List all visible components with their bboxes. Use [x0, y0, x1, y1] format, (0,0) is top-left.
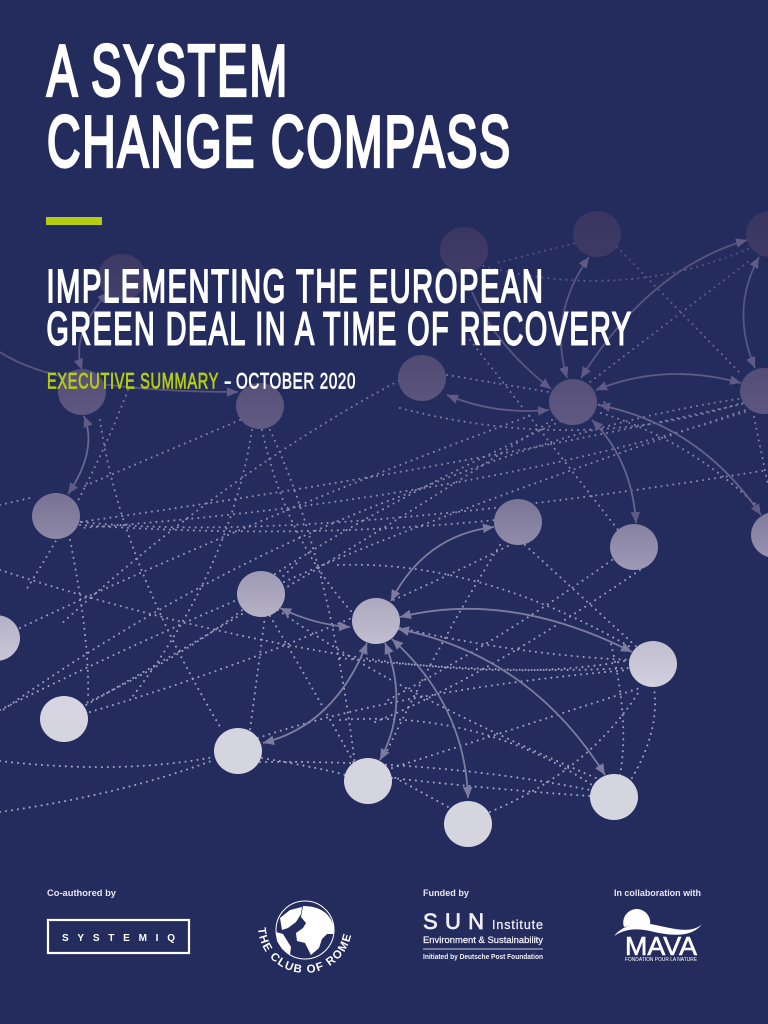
logo: SYSTEMIQ: SYSTEMIQ	[62, 933, 175, 944]
footer labels: In collaboration with	[614, 888, 701, 899]
footer labels: Funded by	[423, 888, 470, 899]
logo: MAVA: MAVA	[625, 933, 697, 961]
logo: SUN Institute: SUN	[423, 909, 484, 934]
logo: SYSTEMIQ	[48, 920, 189, 953]
subtitle	[46, 260, 632, 354]
logo: SUN Institute	[423, 909, 543, 961]
title	[47, 31, 512, 182]
logo: SUN Institute: Initiated by Deutsche Post Foundation	[423, 954, 543, 961]
title: CHANGE COMPASS	[47, 101, 512, 182]
date line: -	[224, 369, 232, 394]
logo: MAVA	[614, 909, 702, 963]
logo: SUN Institute: Environment & Sustainability	[423, 935, 543, 946]
date line: OCTOBER 2020	[236, 369, 356, 394]
footer labels	[47, 888, 701, 899]
date line: EXECUTIVE SUMMARY	[47, 369, 219, 394]
network: dotted connections	[0, 242, 768, 812]
accent bar	[46, 217, 102, 225]
logo: MAVA: FONDATION POUR LA NATURE	[625, 957, 698, 963]
network: curved double-headed arrows	[0, 240, 761, 798]
logo: The Club of Rome: THE CLUB OF ROME	[258, 927, 352, 973]
footer labels: Co-authored by	[47, 888, 117, 899]
title: A SYSTEM	[47, 31, 289, 112]
network: nodes	[0, 211, 768, 847]
logo: SUN Institute: Institute	[492, 918, 543, 932]
logo: The Club of Rome	[258, 900, 352, 973]
